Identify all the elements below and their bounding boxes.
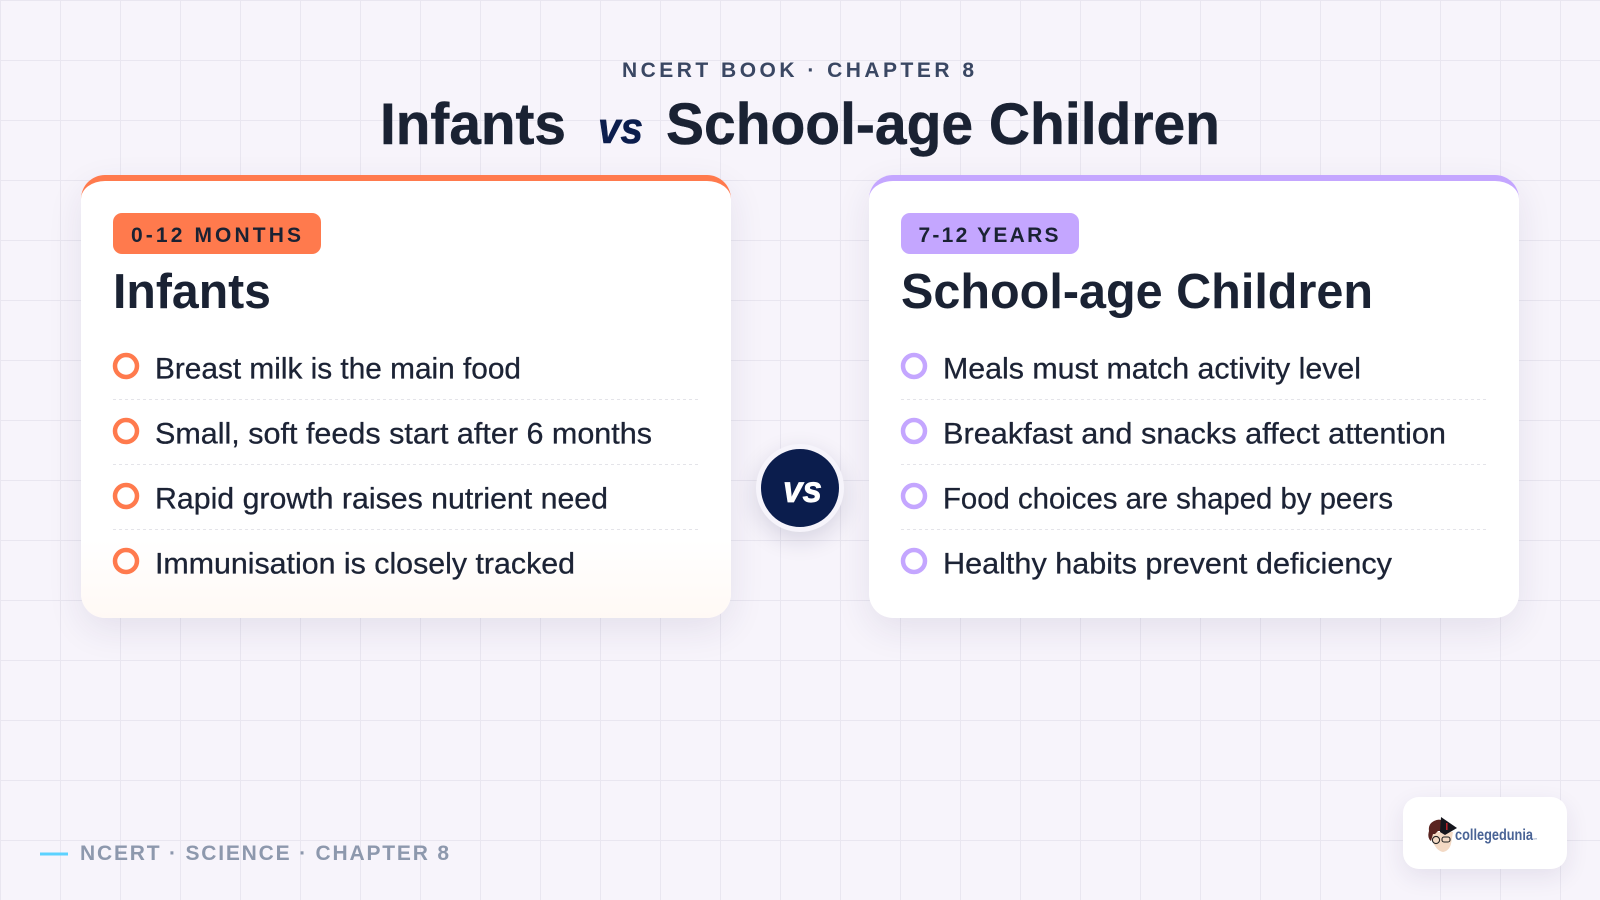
logo suffix: .com (1533, 836, 1537, 840)
panel: school-age children (866, 175, 1522, 633)
vs badge: vs (783, 469, 822, 510)
age tag: 7-12 YEARS (918, 224, 1058, 247)
list item: breakfast: Breakfast and snacks affect attention (943, 418, 1446, 450)
age tag: 0-12 MONTHS (131, 224, 301, 247)
age tag (901, 213, 1079, 254)
footer label: NCERT · SCIENCE · CHAPTER 8 (80, 842, 449, 865)
header (380, 59, 1220, 157)
title: School-age Children (666, 92, 1220, 157)
logo wordmark: collegedunia (1455, 827, 1533, 844)
icon: graduate mascot (1428, 817, 1457, 852)
list item: soft feeds: Small, soft feeds start after 6 months (155, 418, 652, 450)
list item: rapid growth: Rapid growth raises nutrient need (155, 482, 608, 516)
list item: food choices: Food choices are shaped by peers (943, 482, 1393, 516)
age tag (113, 213, 321, 254)
list item: immunisation: Immunisation is closely tracked (155, 548, 575, 580)
heading: School-age Children (901, 265, 1373, 319)
heading: Infants (113, 265, 271, 319)
list item: meals: Meals must match activity level (943, 352, 1361, 386)
vs badge (756, 444, 844, 532)
title (380, 92, 1220, 157)
eyebrow: NCERT BOOK · CHAPTER 8 (622, 59, 974, 82)
panel: infants (78, 175, 734, 633)
list item: healthy habits: Healthy habits prevent deficiency (943, 548, 1392, 580)
logo card (1403, 797, 1567, 869)
title: vs (598, 104, 643, 153)
title: Infants (380, 92, 566, 157)
list item: breast milk: Breast milk is the main food (155, 352, 521, 386)
